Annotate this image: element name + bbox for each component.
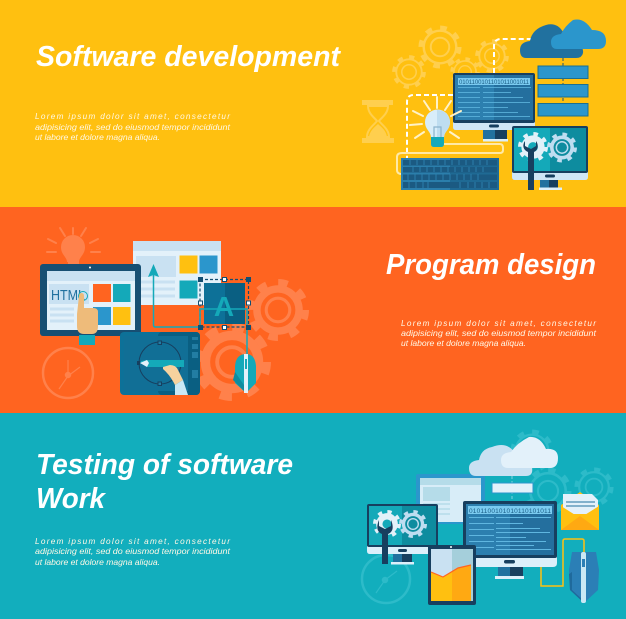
icon: computer mouse — [569, 552, 599, 603]
text block: description: adipisicing elit, sed do eiusmod tempor incididunt — [35, 123, 231, 132]
text block: description: Lorem ipsum dolor sit amet, consectetur — [35, 537, 230, 546]
title: Testing of software Work: Testing of software — [36, 449, 293, 481]
icon: desktop monitor with code — [453, 73, 535, 142]
icon: clouds — [469, 437, 558, 476]
title: Testing of software Work — [36, 449, 293, 515]
text block: description: adipisicing elit, sed do eiusmod tempor incididunt — [35, 547, 231, 556]
icon: pointing hand — [77, 292, 98, 345]
icon: background gears — [198, 283, 305, 396]
panel: software development — [0, 0, 626, 207]
text block: description: adipisicing elit, sed do eiusmod tempor incididunt — [401, 329, 597, 338]
icon: envelope — [561, 492, 599, 530]
text block: description: ut labore et dolore magna aliqua. — [35, 558, 160, 567]
icon: hourglass — [362, 100, 394, 143]
title: Software development: Software development — [36, 41, 341, 73]
icon: desktop monitor with code: 0101100101101011001011 — [459, 80, 530, 86]
icon: clouds — [520, 19, 606, 58]
flow box — [492, 476, 533, 500]
text block: description: Lorem ipsum dolor sit amet, consectetur — [401, 319, 596, 328]
icon: computer mouse — [233, 354, 256, 393]
title: Testing of software Work: Work — [36, 483, 107, 515]
connector: yellow cable — [541, 539, 584, 586]
connector: dashed lines — [397, 39, 531, 174]
icon: monitor with gears and wrench — [367, 504, 439, 564]
icon: background clock — [362, 555, 410, 603]
icon: letter A selection: A — [214, 291, 234, 322]
icon: keyboard — [401, 158, 499, 190]
icon: background gears — [394, 28, 507, 87]
icon: light bulb — [410, 97, 461, 147]
arrow: up to browser and mouse cable — [148, 264, 247, 354]
icon: desktop monitor with code — [463, 501, 557, 579]
icon: browser window — [133, 241, 221, 327]
icon: drawing tablet with pen — [120, 332, 200, 395]
panel: testing of software — [0, 413, 626, 619]
icon: background bulb — [47, 228, 100, 264]
icon: tablet with chart — [428, 545, 476, 605]
text block: description — [35, 112, 231, 142]
icon: letter A selection — [200, 280, 248, 327]
flow boxes — [538, 58, 588, 116]
text block: description: Lorem ipsum dolor sit amet, consectetur — [35, 112, 230, 121]
icon: browser tablet — [416, 474, 485, 524]
text block: description — [401, 319, 597, 348]
text block: description: ut labore et dolore magna aliqua. — [35, 133, 160, 142]
panel: program design — [0, 207, 626, 413]
icon: tablet with HTML — [40, 264, 141, 336]
icon: background gears — [513, 432, 611, 512]
icon: tablet with HTML: HTML — [51, 287, 85, 304]
text block: description: ut labore et dolore magna aliqua. — [401, 339, 526, 348]
icon: background clock — [43, 348, 93, 398]
text block: description — [35, 537, 231, 567]
icon: desktop monitor with code: 0101100101010110101011 — [469, 508, 551, 515]
title: Program design: Program design — [386, 249, 596, 281]
selection handles — [198, 277, 251, 330]
icon: monitor with gears and wrench — [512, 126, 588, 190]
